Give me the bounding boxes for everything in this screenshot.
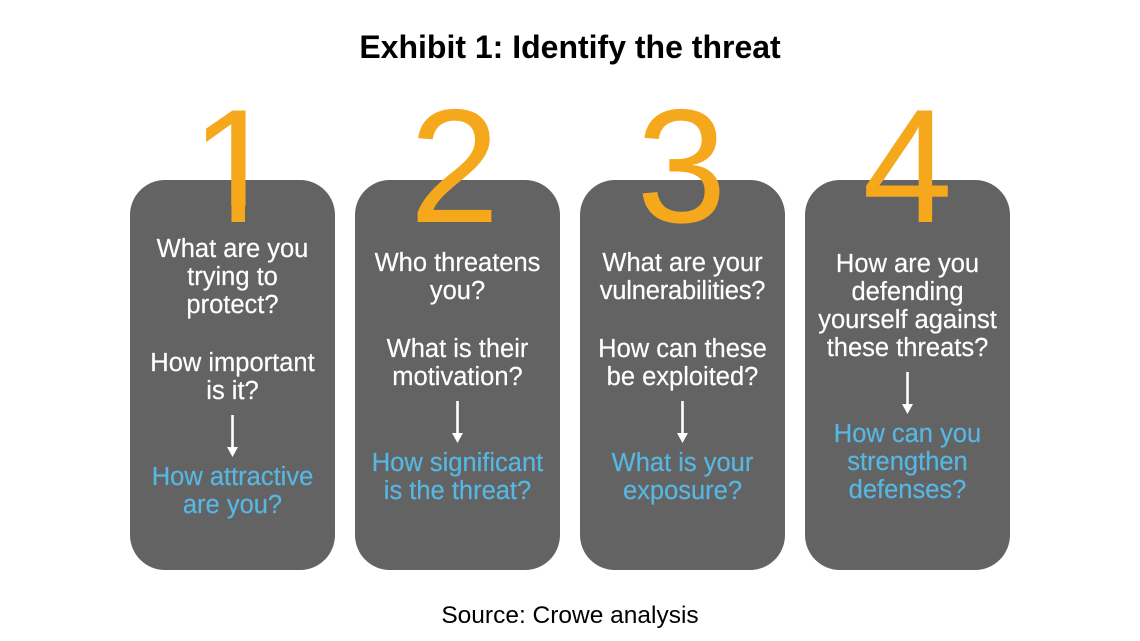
text: card 1 highlight: How attractive — [152, 463, 313, 491]
text: card 3 second question: How can these — [598, 335, 767, 363]
text: card 3 questions — [600, 249, 765, 305]
arrow: card 3 — [677, 401, 688, 443]
arrow: card 1 — [227, 415, 238, 457]
text: card 2 highlight — [372, 449, 544, 505]
panel: card 4 — [805, 180, 1010, 570]
arrow: card 4 — [902, 372, 913, 414]
text: card 2 highlight: is the threat? — [384, 477, 531, 505]
text: card 1 second question — [150, 349, 315, 405]
text: card 4 highlight: strengthen — [847, 448, 968, 476]
number 2: 2 — [409, 76, 500, 257]
source note: Source: Crowe analysis — [441, 602, 699, 629]
arrow: card 2 — [452, 401, 463, 443]
text: card 2 second question — [386, 335, 528, 391]
title: Exhibit 1: Identify the threat — [359, 29, 781, 65]
text: card 4 questions: How are you — [836, 250, 979, 278]
text: card 3 highlight: exposure? — [623, 477, 742, 505]
number 1: 1 — [190, 76, 281, 257]
number 3: 3 — [636, 76, 727, 257]
text: card 1 questions: What are you — [157, 235, 308, 263]
text: card 2 second question: motivation? — [392, 363, 523, 391]
text: card 1 questions: protect? — [186, 291, 279, 319]
text: card 3 second question: be exploited? — [607, 363, 758, 391]
text: card 4 questions: these threats? — [827, 334, 988, 362]
text: card 2 questions: Who threatens — [375, 249, 540, 277]
text: card 1 questions: trying to — [187, 263, 278, 291]
text: card 2 highlight: How significant — [372, 449, 543, 477]
text: card 1 second question: is it? — [206, 377, 259, 405]
text: card 1 questions — [156, 235, 308, 319]
text: card 1 second question: How important — [150, 349, 315, 377]
panel: card 1 — [130, 180, 335, 570]
text: card 3 questions: vulnerabilities? — [600, 277, 765, 305]
text: card 4 questions: yourself against — [818, 306, 997, 334]
text: card 3 questions: What are your — [602, 249, 763, 277]
text: card 3 highlight — [612, 449, 754, 505]
text: card 1 highlight — [152, 463, 313, 519]
text: card 4 questions: defending — [851, 278, 964, 306]
text: card 4 highlight — [834, 420, 981, 504]
text: card 4 highlight: How can you — [834, 420, 981, 448]
text: card 4 highlight: defenses? — [849, 476, 966, 504]
panel: card 3 — [580, 180, 785, 570]
text: card 4 questions — [818, 250, 997, 362]
text: card 3 second question — [598, 335, 767, 391]
text: card 3 highlight: What is your — [612, 449, 753, 477]
number 4: 4 — [862, 76, 953, 257]
panel: card 2 — [355, 180, 560, 570]
text: card 2 questions — [374, 249, 540, 305]
text: card 2 second question: What is their — [387, 335, 528, 363]
text: card 2 questions: you? — [430, 277, 485, 305]
text: card 1 highlight: are you? — [183, 491, 282, 519]
